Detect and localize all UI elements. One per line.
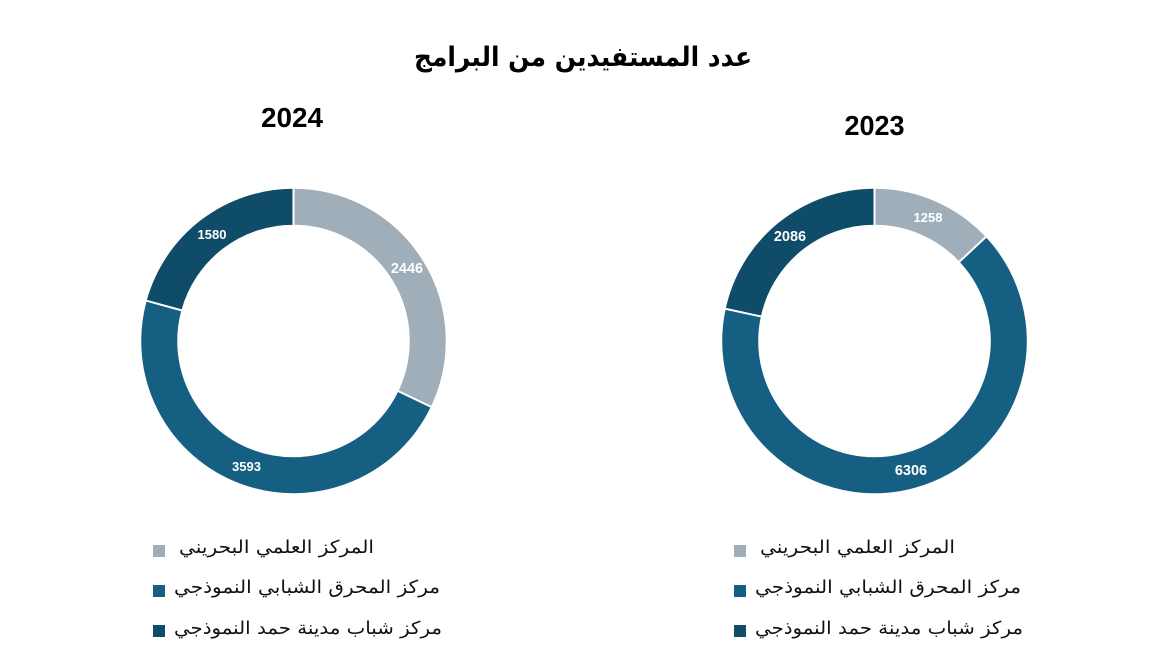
segment: Hamad Town Youth Centre 2086 — [743, 207, 874, 313]
legend: 2024 — [153, 537, 442, 639]
legend swatch: dark teal — [153, 625, 165, 637]
legend label: Al Muharraq Youth Centre: مركز المحرق الشبابي النموذجي — [755, 577, 1021, 598]
legend: 2023 — [734, 537, 1023, 639]
segment: Al Muharraq Youth Centre 6306 — [740, 249, 1009, 475]
heading: 2024: 2024 — [261, 102, 323, 133]
value label: 2446: 2446 — [391, 261, 423, 277]
legend label: Hamad Town Youth Centre: مركز شباب مدينة حمد النموذجي — [174, 618, 442, 639]
segment: Hamad Town Youth Centre 1580 — [164, 207, 294, 305]
value label: 3593: 3593 — [232, 459, 261, 474]
legend swatch: light grey — [734, 545, 746, 557]
donut chart: 2024 — [145, 187, 432, 475]
segment: Bahrain Science Centre 1258 — [874, 207, 973, 249]
heading: 2023: 2023 — [844, 110, 904, 141]
value label: 2086: 2086 — [774, 229, 806, 245]
legend label: Al Muharraq Youth Centre: مركز المحرق الشبابي النموذجي — [174, 577, 440, 598]
title: عدد المستفيدين من البرامج — [414, 42, 752, 73]
legend swatch: teal — [734, 585, 746, 597]
legend swatch: teal — [153, 585, 165, 597]
segment: Bahrain Science Centre 2446 — [294, 207, 428, 399]
value label: 1580: 1580 — [198, 227, 226, 242]
value label: 6306: 6306 — [895, 463, 927, 479]
legend swatch: light grey — [153, 545, 165, 557]
segment: Al Muharraq Youth Centre 3593 — [159, 305, 415, 475]
value label: 1258: 1258 — [914, 210, 942, 225]
legend label: Hamad Town Youth Centre: مركز شباب مدينة حمد النموذجي — [755, 618, 1023, 639]
donut chart: 2023 — [724, 187, 1009, 479]
legend label: Bahrain Science Centre: المركز العلمي البحريني — [760, 537, 955, 558]
legend label: Bahrain Science Centre: المركز العلمي البحريني — [179, 537, 374, 558]
legend swatch: dark teal — [734, 625, 746, 637]
